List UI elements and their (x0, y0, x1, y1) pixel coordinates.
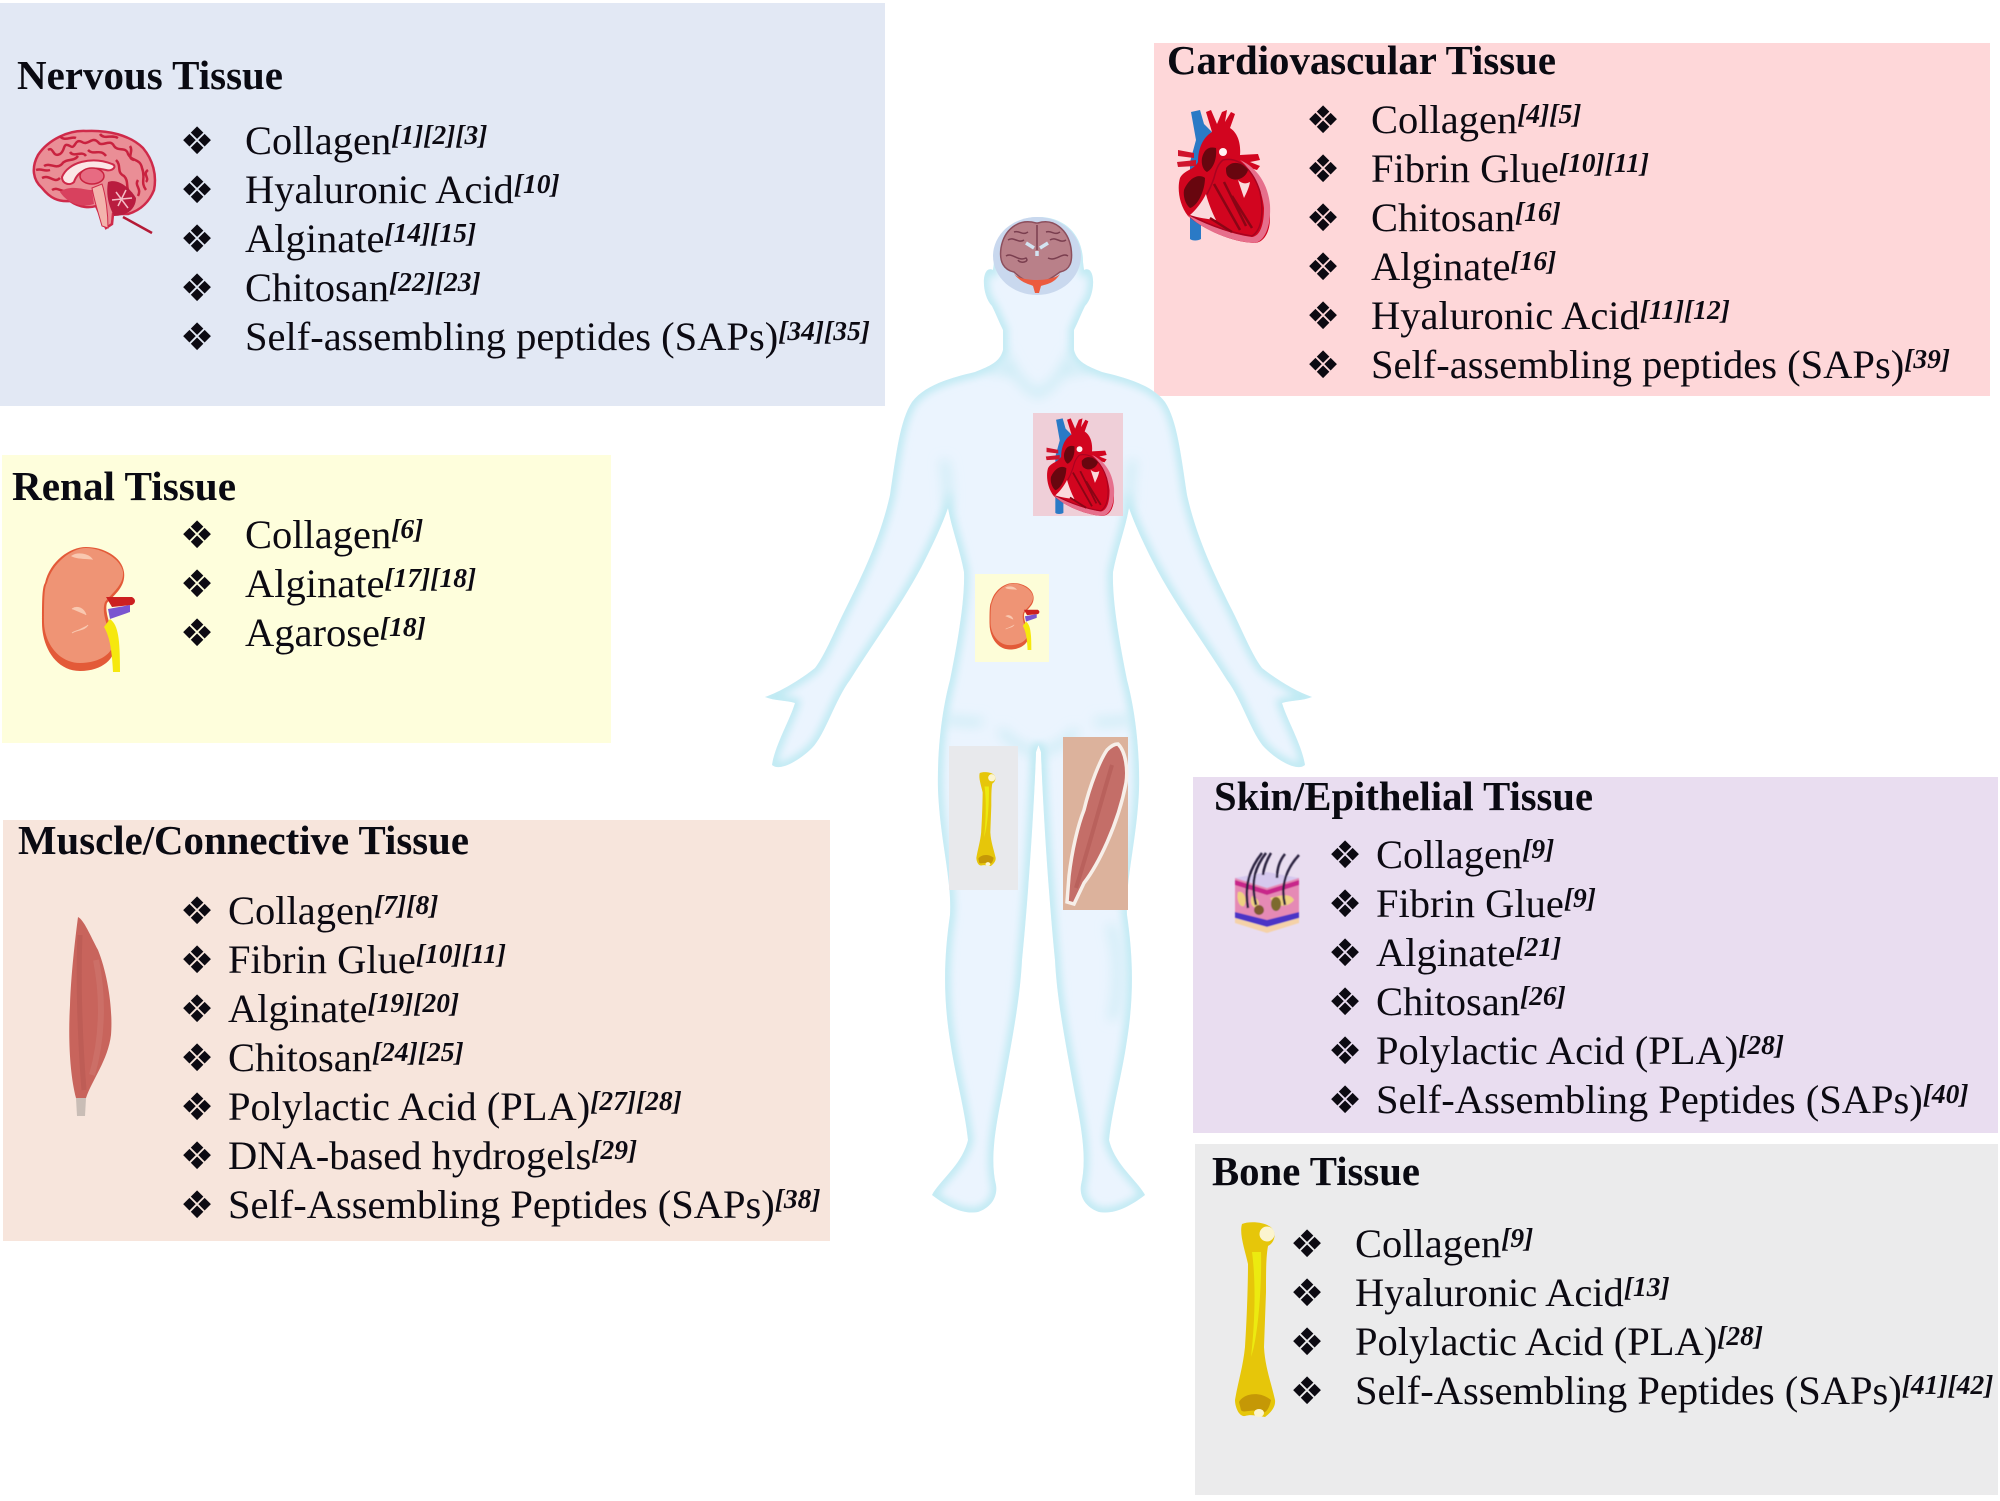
list: nervous materials: Chitosan (245, 265, 389, 310)
list: renal materials: Alginate (245, 561, 384, 606)
list: cardiovascular materials: [10][11] (1559, 147, 1649, 178)
list: skin materials: [9] (1522, 833, 1554, 864)
list: muscle materials: [38] (775, 1183, 821, 1214)
list: cardiovascular materials: Fibrin Glue (1371, 146, 1559, 191)
list: skin materials: ❖ (1328, 833, 1362, 877)
list: cardiovascular materials: ❖ (1306, 147, 1340, 191)
list: bone materials: ❖ (1290, 1222, 1324, 1266)
panel: cardiovascular tissue (1154, 37, 1990, 396)
list: cardiovascular materials: Collagen (1371, 97, 1517, 142)
list: renal materials: Collagen (245, 512, 391, 557)
list: bone materials: ❖ (1290, 1271, 1324, 1315)
icon: muscle (69, 917, 111, 1116)
list: bone materials: [9] (1501, 1222, 1533, 1253)
human body figure (765, 217, 1312, 1213)
list: cardiovascular materials: ❖ (1306, 294, 1340, 338)
list: skin materials: ❖ (1328, 882, 1362, 926)
list: nervous materials: [22][23] (389, 266, 481, 297)
list: cardiovascular materials: ❖ (1306, 196, 1340, 240)
list: nervous materials: ❖ (180, 119, 214, 163)
list: muscle materials: [24][25] (372, 1036, 464, 1067)
list: cardiovascular materials: Self-assembling peptides (SAPs) (1371, 342, 1904, 387)
list: nervous materials: [14][15] (384, 217, 476, 248)
list: muscle materials: Polylactic Acid (PLA) (228, 1084, 590, 1129)
list: bone materials: Polylactic Acid (PLA) (1355, 1319, 1717, 1364)
list: muscle materials: [10][11] (416, 938, 506, 969)
list: renal materials (180, 512, 476, 655)
list: skin materials: ❖ (1328, 931, 1362, 975)
icon: brain sagittal section (34, 131, 155, 233)
list: skin materials: [28] (1738, 1029, 1784, 1060)
list: nervous materials: ❖ (180, 315, 214, 359)
list: muscle materials: [7][8] (374, 889, 438, 920)
list: bone materials: ❖ (1290, 1320, 1324, 1364)
list: nervous materials: [1][2][3] (391, 119, 487, 150)
list: nervous materials: [10] (514, 168, 560, 199)
list: cardiovascular materials: [11][12] (1640, 294, 1730, 325)
list: muscle materials: [29] (591, 1134, 637, 1165)
list: muscle materials: [27][28] (590, 1085, 682, 1116)
list: muscle materials: Collagen (228, 888, 374, 933)
list: cardiovascular materials: [4][5] (1517, 98, 1581, 129)
list: cardiovascular materials: ❖ (1306, 98, 1340, 142)
list: muscle materials: Alginate (228, 986, 367, 1031)
list: muscle materials: Self-Assembling Peptides (SAPs) (228, 1182, 775, 1227)
kidney inset (975, 574, 1049, 662)
panel: nervous tissue (0, 3, 885, 406)
list: cardiovascular materials (1306, 97, 1950, 387)
list: skin materials: [26] (1520, 980, 1566, 1011)
icon: heart (1177, 110, 1270, 243)
brain inside head (993, 217, 1081, 295)
heading: nervous tissue: Nervous Tissue (17, 52, 283, 98)
heading: bone tissue: Bone Tissue (1212, 1148, 1420, 1194)
heading: renal tissue: Renal Tissue (12, 463, 236, 509)
icon: skin cross-section (1235, 853, 1299, 933)
list: renal materials: ❖ (180, 513, 214, 557)
list: skin materials: ❖ (1328, 1029, 1362, 1073)
list: bone materials: [13] (1624, 1271, 1670, 1302)
list: skin materials (1328, 832, 1969, 1122)
list: nervous materials: ❖ (180, 217, 214, 261)
panel: muscle/connective tissue (3, 817, 830, 1241)
heading: skin/epithelial tissue: Skin/Epithelial Tissue (1214, 773, 1593, 819)
list: skin materials: Fibrin Glue (1376, 881, 1564, 926)
list: nervous materials (180, 118, 870, 359)
list: nervous materials: [34][35] (778, 315, 870, 346)
heading: muscle/connective tissue: Muscle/Connective Tissue (18, 817, 469, 863)
panel: renal tissue (2, 455, 611, 743)
list: cardiovascular materials: Hyaluronic Acid (1371, 293, 1640, 338)
list: cardiovascular materials: [16] (1515, 196, 1561, 227)
bone inset (949, 746, 1018, 890)
list: muscle materials: ❖ (180, 938, 214, 982)
list: skin materials: Polylactic Acid (PLA) (1376, 1028, 1738, 1073)
list: bone materials: [28] (1717, 1320, 1763, 1351)
list: cardiovascular materials: [39] (1904, 343, 1950, 374)
list: bone materials: ❖ (1290, 1369, 1324, 1413)
list: bone materials: Hyaluronic Acid (1355, 1270, 1624, 1315)
list: renal materials: [17][18] (384, 562, 476, 593)
list: muscle materials: ❖ (180, 1036, 214, 1080)
list: cardiovascular materials: Alginate (1371, 244, 1510, 289)
list: muscle materials: DNA-based hydrogels (228, 1133, 591, 1178)
list: skin materials: [9] (1564, 882, 1596, 913)
list: skin materials: Alginate (1376, 930, 1515, 975)
heading: cardiovascular tissue: Cardiovascular Tissue (1167, 37, 1556, 83)
list: renal materials: [6] (391, 513, 423, 544)
list: muscle materials: ❖ (180, 889, 214, 933)
icon: femur (1235, 1222, 1275, 1417)
list: nervous materials: Collagen (245, 118, 391, 163)
list: bone materials (1290, 1221, 1993, 1413)
list: muscle materials: ❖ (180, 987, 214, 1031)
list: cardiovascular materials: ❖ (1306, 343, 1340, 387)
list: muscle materials: Chitosan (228, 1035, 372, 1080)
list: nervous materials: ❖ (180, 266, 214, 310)
list: muscle materials: Fibrin Glue (228, 937, 416, 982)
muscle inset (1063, 737, 1128, 910)
icon: kidney (42, 547, 135, 672)
list: skin materials: [40] (1923, 1078, 1969, 1109)
list: nervous materials: ❖ (180, 168, 214, 212)
list: renal materials: [18] (380, 611, 426, 642)
list: bone materials: [41][42] (1902, 1369, 1993, 1400)
list: cardiovascular materials: [16] (1510, 245, 1556, 276)
list: muscle materials: ❖ (180, 1085, 214, 1129)
list: cardiovascular materials: Chitosan (1371, 195, 1515, 240)
list: muscle materials (180, 888, 821, 1227)
list: bone materials: Self-Assembling Peptides (SAPs) (1355, 1368, 1902, 1413)
list: skin materials: Chitosan (1376, 979, 1520, 1024)
list: renal materials: Agarose (245, 610, 380, 655)
list: nervous materials: Self-assembling peptides (SAPs) (245, 314, 778, 359)
list: cardiovascular materials: ❖ (1306, 245, 1340, 289)
panel: bone tissue (1195, 1144, 1998, 1495)
list: skin materials: ❖ (1328, 980, 1362, 1024)
list: renal materials: ❖ (180, 562, 214, 606)
list: muscle materials: ❖ (180, 1183, 214, 1227)
list: skin materials: [21] (1515, 931, 1561, 962)
list: bone materials: Collagen (1355, 1221, 1501, 1266)
list: muscle materials: [19][20] (367, 987, 459, 1018)
list: skin materials: Collagen (1376, 832, 1522, 877)
list: muscle materials: ❖ (180, 1134, 214, 1178)
panel: skin/epithelial tissue (1193, 773, 1998, 1133)
list: skin materials: Self-Assembling Peptides (SAPs) (1376, 1077, 1923, 1122)
list: renal materials: ❖ (180, 611, 214, 655)
list: skin materials: ❖ (1328, 1078, 1362, 1122)
heart inset (1033, 413, 1123, 516)
list: nervous materials: Hyaluronic Acid (245, 167, 514, 212)
list: nervous materials: Alginate (245, 216, 384, 261)
